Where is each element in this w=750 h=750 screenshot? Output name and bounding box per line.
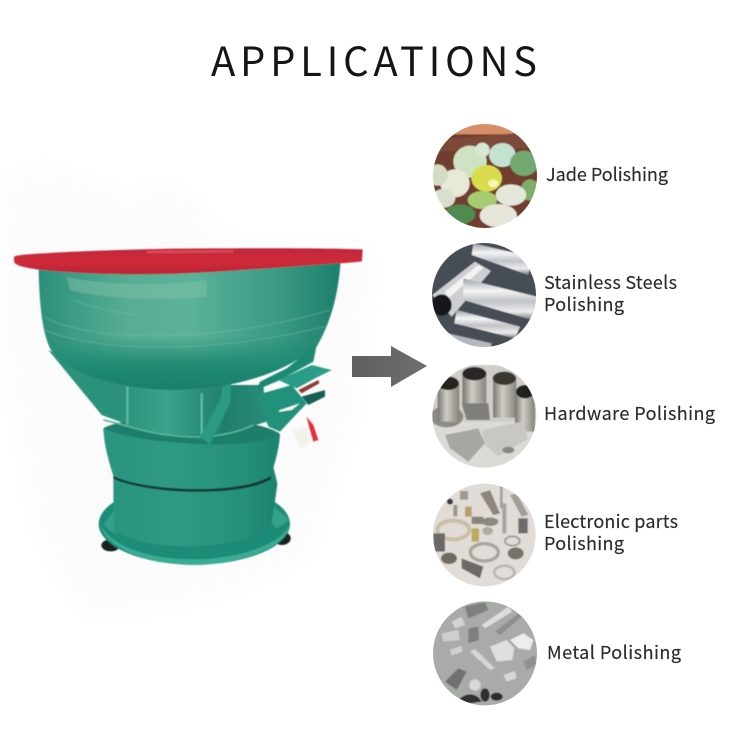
machine: bowl — [38, 260, 341, 390]
label: electronic parts polishing — [544, 508, 678, 556]
label: stainless steels polishing — [544, 269, 677, 317]
photo: stainless tubes — [432, 243, 536, 347]
machine: upper ring — [103, 420, 280, 489]
label: stainless steels polishing: Stainless Steels — [544, 269, 677, 295]
machine: red rim — [14, 248, 363, 274]
machine: black feet — [101, 532, 291, 551]
machine: chute — [48, 350, 133, 427]
label: stainless steels polishing: Polishing — [544, 291, 624, 317]
photo: hardware parts — [432, 364, 536, 468]
machine: black seam — [113, 476, 271, 492]
label: electronic parts polishing: Electronic parts — [544, 508, 678, 534]
machine: base plate — [99, 483, 290, 565]
title: APPLICATIONS — [211, 30, 537, 88]
label: hardware polishing: Hardware Polishing — [544, 400, 715, 426]
label: jade polishing: Jade Polishing — [546, 161, 668, 187]
background: faint haze behind machine — [5, 170, 370, 610]
application: stainless steels polishing — [432, 243, 676, 347]
machine: discharge valve — [257, 345, 332, 448]
machine: rib — [200, 373, 232, 445]
machine: neck column — [127, 385, 267, 435]
photo: electronic parts — [433, 484, 536, 586]
label: metal polishing: Metal Polishing — [547, 639, 681, 665]
vibratory polishing machine — [14, 248, 363, 565]
label: electronic parts polishing: Polishing — [544, 530, 624, 556]
application: metal polishing — [425, 598, 681, 708]
application: jade polishing — [425, 115, 668, 235]
application: electronic parts polishing — [425, 482, 678, 588]
machine: lower cylinder — [113, 460, 277, 546]
application: hardware polishing — [425, 365, 715, 472]
photo: jade stones — [433, 124, 537, 228]
arrow — [352, 346, 427, 387]
photo: metal parts — [433, 601, 537, 706]
